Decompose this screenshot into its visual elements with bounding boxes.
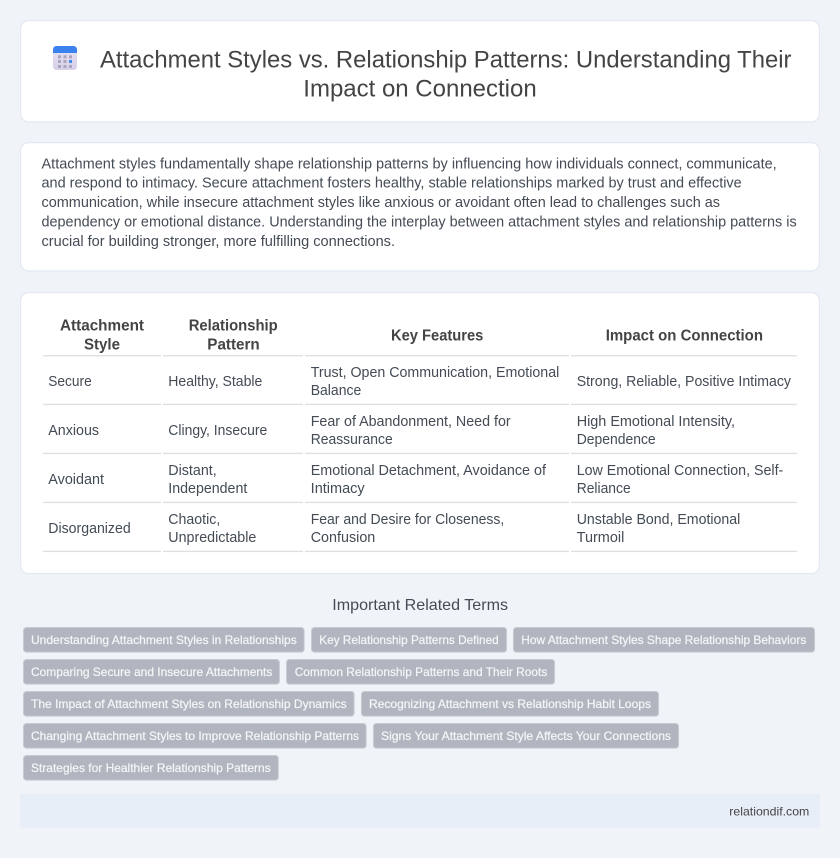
tag — [362, 692, 658, 716]
tag — [24, 660, 279, 684]
tag: How Attachment Styles Shape Relationship Behaviors — [521, 633, 806, 647]
text block: introduction paragraph: Attachment styles fundamentally shape relationship patterns by influencing how individuals connect, communicate, — [42, 156, 777, 172]
table header row: Impact on Connection — [606, 328, 763, 345]
table row: anxious: Anxious — [48, 423, 99, 439]
table row: anxious: Dependence — [577, 432, 656, 448]
text block: introduction paragraph — [42, 156, 797, 250]
table row: anxious: Reassurance — [311, 432, 393, 448]
table row: disorganized: Fear and Desire for Closeness, — [311, 512, 504, 528]
tag — [312, 628, 506, 652]
table header row: Relationship — [189, 318, 278, 335]
tag: Signs Your Attachment Style Affects Your Connections — [381, 729, 671, 743]
table row: disorganized: Confusion — [311, 530, 375, 546]
table header row: Key Features — [391, 328, 483, 345]
tag — [24, 756, 278, 780]
table row: disorganized — [43, 512, 797, 552]
table row: avoidant: Emotional Detachment, Avoidance of — [311, 463, 547, 479]
table row: anxious: High Emotional Intensity, — [577, 414, 735, 430]
tag list: related terms — [24, 628, 814, 780]
tag — [24, 724, 366, 748]
tag — [286, 660, 554, 684]
footer: relationdif.com — [729, 804, 809, 818]
tag — [24, 628, 304, 652]
table row: secure: Healthy, Stable — [168, 374, 262, 390]
table row: secure: Strong, Reliable, Positive Intimacy — [577, 374, 792, 390]
table row: disorganized: Turmoil — [577, 530, 624, 546]
icon: calendar — [53, 46, 77, 70]
table row: secure: Trust, Open Communication, Emotional — [311, 365, 559, 381]
title: Impact on Connection — [303, 76, 537, 102]
title — [100, 46, 792, 102]
table row: disorganized: Unstable Bond, Emotional — [577, 512, 740, 528]
table row: anxious — [43, 414, 797, 454]
footer — [20, 794, 820, 828]
panel: header — [21, 21, 819, 122]
title: Attachment Styles vs. Relationship Patterns: Understanding Their — [100, 46, 792, 74]
table row: disorganized: Chaotic, — [168, 512, 220, 528]
table header row — [43, 318, 797, 356]
text block: introduction paragraph: and respond to intimacy. Secure attachment fosters healthy, stable relationships marked by trust and effective — [42, 176, 742, 192]
table header row: Pattern — [207, 337, 260, 354]
text block: introduction paragraph: crucial for building stronger, more fulfilling connections. — [42, 234, 395, 250]
tag: Common Relationship Patterns and Their Roots — [295, 665, 547, 679]
tag: Key Relationship Patterns Defined — [319, 633, 499, 647]
tag: Strategies for Healthier Relationship Patterns — [31, 761, 271, 775]
heading: important related terms: Important Related Terms — [332, 597, 508, 614]
text block: introduction paragraph: communication, while insecure attachment styles like anxious or avoidant often lead to challenges such as — [42, 195, 720, 211]
tag: Understanding Attachment Styles in Relationships — [31, 633, 297, 647]
table row: avoidant — [43, 463, 797, 503]
table row: disorganized: Unpredictable — [168, 530, 256, 546]
table row: secure: Secure — [48, 374, 92, 390]
table row: secure — [43, 365, 797, 405]
table row: anxious: Fear of Abandonment, Need for — [311, 414, 511, 430]
table row: avoidant: Reliance — [577, 481, 631, 497]
table header row: Style — [84, 337, 120, 354]
tag: Recognizing Attachment vs Relationship Habit Loops — [369, 697, 651, 711]
tag — [24, 692, 354, 716]
panel: introduction — [21, 143, 819, 271]
tag: Comparing Secure and Insecure Attachments — [31, 665, 272, 679]
text block: introduction paragraph: dependency or emotional distance. Understanding the interplay between attachment styles and relationship patterns is — [42, 215, 797, 231]
tag — [514, 628, 814, 652]
panel: comparison table — [21, 293, 819, 574]
table row: avoidant: Intimacy — [311, 481, 365, 497]
tag: The Impact of Attachment Styles on Relationship Dynamics — [31, 697, 347, 711]
table row: anxious: Clingy, Insecure — [168, 423, 267, 439]
table header row: Attachment — [60, 318, 144, 335]
tag: Changing Attachment Styles to Improve Relationship Patterns — [31, 729, 359, 743]
table row: avoidant: Low Emotional Connection, Self- — [577, 463, 784, 479]
table row: secure: Balance — [311, 383, 361, 399]
table row: avoidant: Independent — [168, 481, 247, 497]
table row: avoidant: Avoidant — [48, 472, 104, 488]
tag — [374, 724, 678, 748]
table row: disorganized: Disorganized — [48, 521, 131, 537]
table row: avoidant: Distant, — [168, 463, 217, 479]
